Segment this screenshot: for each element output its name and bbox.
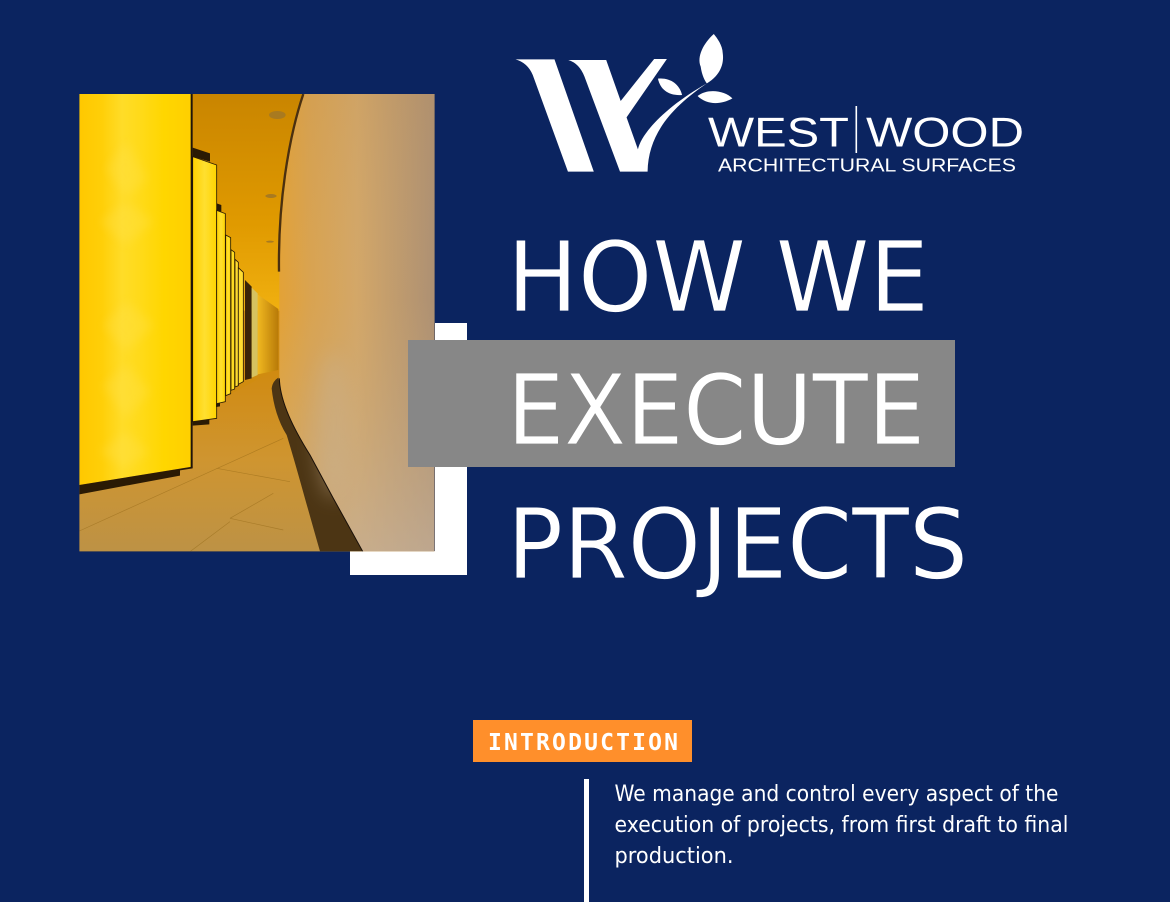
tag background bbox=[473, 720, 692, 762]
introduction tag bbox=[473, 720, 692, 762]
photo: large foreground light panel bbox=[79, 94, 192, 485]
photo: panel soft highlights bbox=[104, 150, 150, 464]
title line: PROJECTS: PROJECTS bbox=[507, 488, 968, 601]
paragraph line 2: execution of projects, from first draft to final bbox=[614, 813, 1068, 838]
photo: illuminated yellow corridor bbox=[79, 94, 435, 552]
photo: wall pale lower glow bbox=[317, 352, 350, 498]
photo: wall soft shading bbox=[280, 342, 435, 552]
photo: receding light panels bbox=[193, 157, 243, 422]
title line: EXECUTE: EXECUTE bbox=[507, 354, 925, 467]
photo: panel base shadow bbox=[79, 467, 193, 494]
vertical rule bbox=[584, 779, 589, 902]
photo: far pale strip bbox=[252, 288, 258, 378]
photo: floor bbox=[79, 392, 362, 552]
tag label: INTRODUCTION bbox=[488, 730, 678, 756]
grey highlight behind EXECUTE bbox=[408, 340, 955, 467]
logo tagline: ARCHITECTURAL SURFACES bbox=[718, 154, 1016, 176]
photo: wall lower shadow edge bbox=[279, 378, 363, 551]
photo: ceiling lights bbox=[265, 111, 286, 243]
photo: far dark doorway bbox=[245, 280, 252, 380]
logo divider bbox=[856, 106, 857, 153]
photo: far corridor end bbox=[258, 294, 278, 374]
title: How We Execute Projects bbox=[507, 221, 968, 601]
photo: ceiling bbox=[192, 94, 305, 311]
photo: curved wall bbox=[279, 94, 435, 551]
photo: base tone bbox=[79, 94, 435, 551]
photo: panel right edge bbox=[191, 94, 193, 467]
paragraph line 1: We manage and control every aspect of the bbox=[614, 782, 1058, 807]
introduction paragraph bbox=[614, 782, 1068, 869]
photo: floor drainage grate bbox=[272, 378, 363, 551]
logo mark: W with leaves bbox=[516, 34, 732, 172]
photo: wall upper dark edge bbox=[279, 94, 303, 272]
paragraph line 3: production. bbox=[614, 844, 734, 869]
white L-shaped frame behind photo bbox=[350, 323, 467, 575]
logo: Westwood Architectural Surfaces bbox=[516, 34, 1024, 175]
title line: HOW WE: HOW WE bbox=[507, 221, 929, 334]
logo wordmark: WOOD: WOOD bbox=[866, 108, 1024, 156]
photo: floor tile joints bbox=[79, 438, 290, 552]
logo wordmark: WEST: WEST bbox=[708, 108, 849, 156]
photo: dark panel tops and feet bbox=[193, 148, 221, 426]
